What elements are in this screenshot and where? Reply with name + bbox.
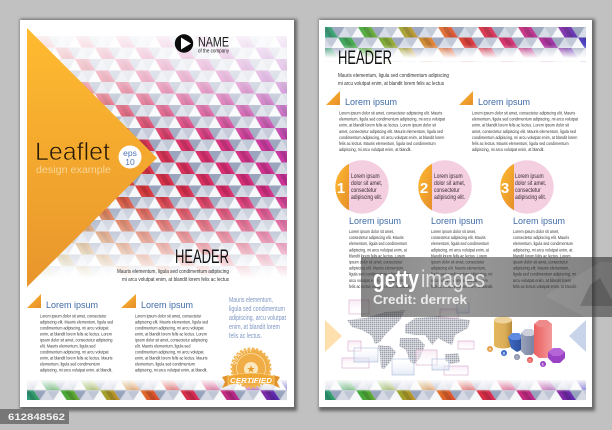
upper right text: adipiscing, mi arcu volutpat enim, at blandit. (472, 147, 545, 152)
blue side text: Mauris elementum, (229, 295, 273, 304)
lower column 1: felis ac lectus volutpat enim, at blandit. (349, 283, 411, 289)
certified seal: CERTIFIED (230, 376, 273, 385)
intro text: Mauris elementum, ligula sed condimentum adipiscing (338, 73, 449, 79)
lower column 3: elementum, ligula sed condimentum (513, 241, 573, 246)
heading: HEADER: HEADER (175, 247, 229, 268)
lower column 3: felis ac lectus volutpat enim, at blandit. (513, 283, 577, 289)
badge: eps 10 (118, 146, 142, 168)
upper right text: amet, consectetur adipiscing elit. Mauris elementum, ligula sed (472, 128, 576, 134)
3D bar chart: E (542, 362, 545, 366)
column 2 text: condimentum adipiscing, mi arcu volutpat (135, 325, 204, 331)
column 1 text: elit. Mauris elementum, ligula sed (40, 343, 96, 349)
lower column 3: Lorem ipsum dolor sit amet, (513, 229, 559, 234)
certified seal (222, 348, 280, 388)
blue side text: adipiscing, arcu volutpat (229, 313, 287, 322)
column 2 heading (121, 294, 193, 311)
upper right text: Lorem ipsum dolor sit amet, consectetur adipiscing elit. Mauris (472, 110, 575, 116)
watermark band: Credit: derrrek (373, 293, 467, 307)
numbered circle 1: 1 (337, 180, 345, 197)
colour triangle band (27, 380, 287, 400)
lower column 1: adipiscing elit. Mauris elementum, (349, 265, 404, 271)
3D bar chart (487, 316, 565, 367)
column 1 heading (27, 294, 98, 311)
intro text: Mauris elementum, ligula sed condimentum adipiscing (117, 269, 229, 275)
column 1 text: condimentum adipiscing, mi arcu volutpat (40, 325, 109, 331)
lower column 3: adipiscing, mi arcu volutpat enim, at (513, 247, 573, 252)
upper left heading: Lorem ipsum (345, 97, 397, 108)
lower column 3: ipsum dolor sit amet, consectetur (513, 259, 568, 265)
numbered circle 1: adipiscing elit. (351, 195, 383, 201)
lower column 1: elementum, ligula sed condimentum (349, 241, 408, 246)
numbered circle 1: dolor sit amet, (351, 181, 383, 187)
lower column 2: Lorem ipsum (431, 216, 483, 227)
lower column 3: blandit lorem felis ac lectus. Lorem (513, 253, 571, 259)
lower column 1: arcu volutpat enim, at blandit lorem (349, 277, 406, 283)
lower column 2: arcu volutpat enim, at blandit lorem (431, 277, 488, 283)
world map with callout boxes (342, 300, 474, 375)
lower column 3: Lorem ipsum (513, 216, 565, 227)
lower column 1: adipiscing, mi arcu volutpat enim, at (349, 247, 408, 252)
arrow: pale orange triangle (325, 320, 342, 352)
upper right text: elementum, ligula sed condimentum adipiscing, mi arcu volutpat (472, 116, 579, 122)
heading: HEADER: HEADER (338, 48, 392, 69)
blue side text (229, 295, 287, 340)
upper left text: elementum, ligula sed condimentum adipiscing, mi arcu volutpat (339, 116, 446, 122)
numbered circle 2: Lorem ipsum (434, 174, 463, 180)
lower column 2: blandit lorem felis ac lectus. Lorem (431, 253, 487, 259)
badge: eps 10: 10 (125, 157, 135, 167)
column 2 text: enim, at blandit lorem felis ac lectus. Mauris (135, 355, 208, 361)
upper right text: felis ac lectus. Mauris elementum, ligula sed condimentum (472, 141, 569, 146)
column 1 text: enim, at blandit lorem felis ac lectus. Lorem (40, 331, 112, 337)
upper right text: enim, at blandit lorem felis ac lectus. Lorem ipsum dolor sit (472, 122, 570, 128)
column 2 text: adipiscing, mi arcu volutpat enim, at blandit. (135, 367, 208, 373)
column 1 text: Lorem ipsum dolor sit amet, consectetur (40, 313, 107, 319)
lower column 1: ligula sed condimentum adipiscing, mi (349, 271, 410, 277)
lower column 2: felis ac lectus volutpat enim, at blandit. (431, 283, 493, 289)
colour triangle header band (325, 27, 586, 62)
orange title triangle (27, 28, 157, 287)
upper right text: condimentum adipiscing, mi arcu volutpat enim, at blandit lorem (472, 134, 578, 140)
column 1 text (40, 313, 114, 373)
watermark band: images (421, 266, 485, 293)
upper left text: condimentum adipiscing, mi arcu volutpat enim, at blandit lorem (339, 134, 445, 140)
upper right heading (459, 91, 530, 108)
numbered circle 3: adipiscing elit. (515, 195, 547, 201)
upper left heading (326, 91, 397, 108)
column 1 text: elementum, ligula sed condimentum (40, 361, 100, 367)
icon: play logo (175, 34, 193, 53)
lower column 3: consectetur adipiscing elit. Mauris (513, 235, 569, 240)
badge: eps 10: eps (123, 148, 137, 158)
company name (198, 34, 229, 54)
numbered circle 2: adipiscing elit. (434, 195, 466, 201)
column 2 text: adipiscing elit. Mauris elementum, ligula sed (135, 319, 209, 325)
company name: NAME (198, 34, 229, 50)
upper left text (339, 110, 446, 152)
lower column 2: ligula sed condimentum adipiscing, mi (431, 271, 492, 277)
column 2 text: ipsum dolor sit amet, consectetur adipiscing (135, 337, 208, 343)
numbered circle 2 (418, 160, 472, 214)
stock id label (0, 409, 69, 424)
column 2 text: elit. Mauris elementum, ligula sed (135, 343, 191, 349)
blue side text: ligula sed condimentum (229, 304, 285, 313)
lower column 1: blandit lorem felis ac lectus. Lorem (349, 253, 405, 259)
lower column 1 (349, 216, 411, 289)
numbered circle 3 (500, 160, 554, 214)
panel: left leaflet page (18, 17, 299, 413)
3D bar chart: C (516, 354, 519, 360)
lower column 3: adipiscing elit. Mauris elementum, (513, 265, 569, 271)
numbered circle 3: consectetur (515, 188, 541, 194)
upper left text: enim, at blandit lorem felis ac lectus. Lorem ipsum dolor sit (339, 122, 437, 128)
column 2 text: condimentum adipiscing, mi arcu volutpat (135, 349, 204, 355)
lower column 2: elementum, ligula sed condimentum (431, 241, 490, 246)
hexagon mosaic background (27, 36, 287, 286)
stock id label: 612848562 (8, 412, 65, 423)
numbered circle 3: 3 (501, 180, 509, 197)
upper right text (472, 110, 579, 152)
upper left text: adipiscing, mi arcu volutpat enim, at blandit. (339, 147, 412, 152)
lower column 2: ipsum dolor sit amet, consectetur (431, 259, 485, 265)
upper left text: Lorem ipsum dolor sit amet, consectetur adipiscing elit. Mauris (339, 110, 442, 116)
lower column 3 (513, 216, 577, 289)
column 2 text: Lorem ipsum dolor sit amet, consectetur (135, 313, 202, 319)
lower column 2 (431, 216, 493, 289)
lower column 1: ipsum dolor sit amet, consectetur (349, 259, 403, 265)
arrow: pale blue triangle (569, 320, 586, 352)
certified seal: QUALITY (232, 348, 252, 364)
watermark band (361, 257, 612, 317)
certified seal: ★ (247, 364, 256, 376)
numbered circle 1: consectetur (351, 188, 377, 194)
intro text (338, 73, 449, 87)
column 1 text: adipiscing elit. Mauris elementum, ligula sed (40, 319, 114, 325)
3D bar chart: A (489, 346, 492, 352)
lower column 3: ligula sed condimentum adipiscing, mi (513, 271, 576, 277)
subtitle: design example: design example (36, 164, 111, 176)
column 1 text: ipsum dolor sit amet, consectetur adipiscing (40, 337, 113, 343)
intro text (117, 269, 229, 283)
column 1 text: enim, at blandit lorem felis ac lectus. Mauris (40, 355, 113, 361)
intro text: mi arcu volutpat enim, at blandit lorem felis ac lectus (338, 81, 444, 87)
intro text: mi arcu volutpat enim, at blandit lorem felis ac lectus (122, 277, 229, 283)
column 2 text: enim, at blandit lorem felis ac lectus. Lorem (135, 331, 207, 337)
lower column 2: Lorem ipsum dolor sit amet, (431, 228, 476, 234)
column 1 text: condimentum adipiscing, mi arcu volutpat (40, 349, 109, 355)
column 1 text: adipiscing, mi arcu volutpat enim, at blandit. (40, 367, 113, 373)
blue side text: felis ac lectus. (229, 331, 262, 340)
numbered circle 2: consectetur (434, 188, 460, 194)
numbered circle 1 (335, 160, 389, 214)
numbered circle 2: dolor sit amet, (434, 181, 466, 187)
numbered circle 1: Lorem ipsum (351, 174, 380, 180)
upper left text: amet, consectetur adipiscing elit. Mauris elementum, ligula sed (339, 128, 443, 134)
title: Leaflet: Leaflet (35, 138, 110, 166)
upper left text: felis ac lectus. Mauris elementum, ligula sed condimentum (339, 141, 436, 146)
lower column 1: Lorem ipsum (349, 216, 401, 227)
numbered circle 2: 2 (420, 180, 428, 197)
lower column 1: Lorem ipsum dolor sit amet, (349, 228, 394, 234)
numbered circle 3: Lorem ipsum (515, 174, 544, 180)
lower column 3: arcu volutpat enim, at blandit lorem (513, 277, 572, 283)
colour triangle footer band (325, 380, 586, 400)
lower column 2: consectetur adipiscing elit. Mauris (431, 235, 486, 240)
3D bar chart: D (529, 358, 532, 362)
lower column 1: consectetur adipiscing elit. Mauris (349, 235, 404, 240)
column 2 text: elementum, ligula sed condimentum (135, 361, 195, 367)
company name: of the company (198, 48, 229, 54)
numbered circle 3: dolor sit amet, (515, 181, 547, 187)
panel: right leaflet page (319, 19, 595, 411)
lower column 2: adipiscing, mi arcu volutpat enim, at (431, 247, 490, 252)
column 2 heading: Lorem ipsum (141, 300, 193, 311)
blue side text: enim, at blandit lorem (229, 322, 280, 331)
upper right heading: Lorem ipsum (478, 97, 530, 108)
column 1 heading: Lorem ipsum (46, 300, 98, 311)
lower column 2: adipiscing elit. Mauris elementum, (431, 265, 486, 271)
column 2 text (135, 313, 209, 373)
3D bar chart: B (503, 350, 506, 356)
watermark band: getty (373, 266, 420, 293)
